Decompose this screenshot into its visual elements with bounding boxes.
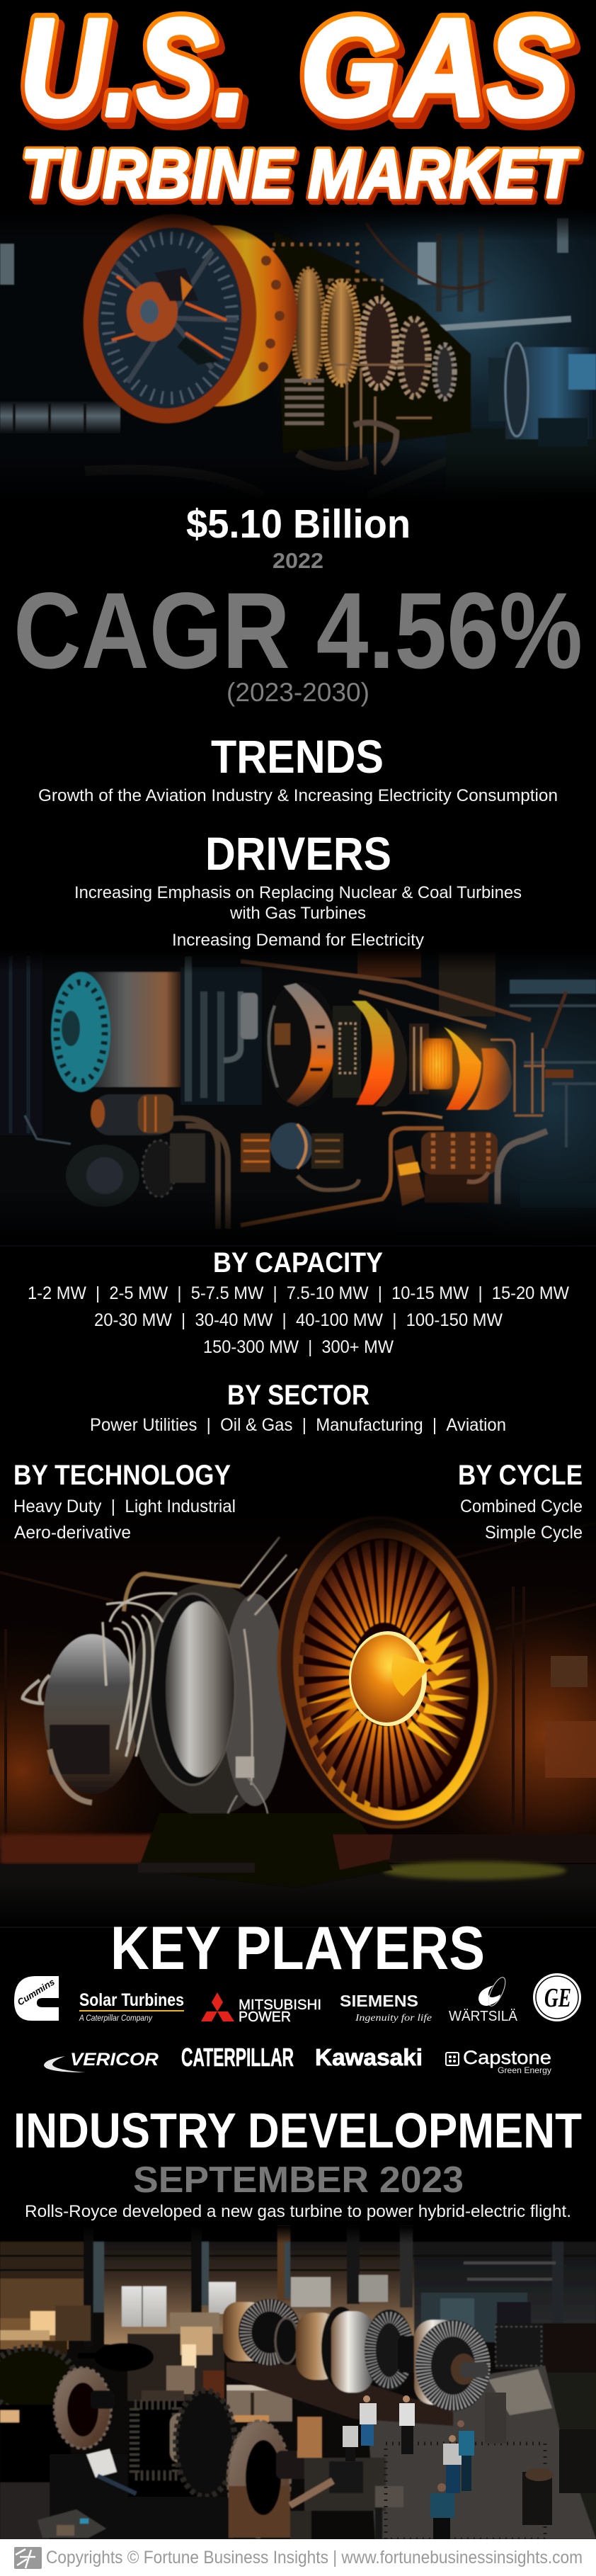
logo: Wartsila (449, 1975, 518, 2024)
cycle options: Combined Cycle (460, 1497, 583, 1516)
section: by capacity (28, 1247, 569, 1357)
logo: Mitsubishi Power: POWER (239, 2009, 291, 2025)
image: glowing jet turbine (0, 1507, 596, 1928)
title (20, 0, 582, 216)
image: gas turbine engine in dark hall (0, 205, 596, 503)
fan cone (349, 1631, 432, 1726)
capacity options (28, 1283, 569, 1357)
logo: Wartsila: WÄRTSILÄ (449, 2009, 518, 2024)
footer bar (0, 2539, 596, 2576)
development date: SEPTEMBER 2023 (133, 2160, 464, 2201)
capacity options: 150-300 MW | 300+ MW (203, 1337, 394, 1357)
logo: Mitsubishi Power: MITSUBISHI (239, 1997, 321, 2013)
title line: TURBINE MARKET: MARKET (308, 135, 579, 212)
logo: Cummins (14, 1976, 59, 2021)
drivers text: Increasing Demand for Electricity (172, 931, 424, 950)
logo: Mitsubishi Power (201, 1992, 321, 2025)
title line: TURBINE MARKET: MARKET (311, 139, 582, 216)
logo: GE: GE (544, 1983, 571, 2013)
logo: Cummins: Cummins (16, 1976, 57, 2008)
logo: Siemens: Ingenuity for life (355, 2013, 432, 2024)
logo: Vericor: VERICOR (70, 2050, 159, 2070)
title line: TURBINE MARKET: TURBINE (21, 135, 294, 212)
logo: Vericor (44, 2050, 159, 2072)
CAGR period: (2023-2030) (227, 678, 369, 707)
technology options: Aero-derivative (14, 1523, 131, 1543)
section: by sector (90, 1380, 506, 1435)
logo: Capstone Green Energy: Capstone (463, 2047, 551, 2068)
logo: Siemens (340, 1992, 432, 2024)
logo: Solar Turbines (79, 1990, 184, 2023)
workers (343, 2395, 474, 2539)
logo: GE (533, 1973, 581, 2021)
market size value: $5.10 Billion (186, 501, 411, 547)
heading: by sector: BY SECTOR (227, 1380, 369, 1411)
market size year: 2022 (273, 548, 323, 573)
trends text: Growth of the Aviation Industry & Increasing Electricity Consumption (38, 786, 558, 805)
development text: Rolls-Royce developed a new gas turbine to power hybrid-electric flight. (25, 2202, 571, 2221)
heading: by technology: BY TECHNOLOGY (13, 1460, 231, 1491)
logo: Capstone Green Energy (446, 2047, 551, 2075)
capacity options: 1-2 MW | 2-5 MW | 5-7.5 MW | 7.5-10 MW | 10-15 MW | 15-20 MW (28, 1283, 569, 1303)
heading: key players: KEY PLAYERS (110, 1914, 485, 1982)
title line: TURBINE MARKET (21, 135, 582, 216)
foreground machinery (0, 2347, 403, 2539)
logo: Caterpillar: CATERPILLAR (181, 2043, 294, 2072)
heading: by capacity: BY CAPACITY (213, 1247, 383, 1278)
section: by cycle (458, 1460, 583, 1543)
image: turbine machinery with glowing section (0, 949, 596, 1247)
fan wheel (264, 1507, 510, 1838)
title line: TURBINE MARKET: TURBINE (21, 135, 294, 212)
logo: Solar Turbines: Solar Turbines (79, 1990, 184, 2010)
title line: TURBINE MARKET: TURBINE (24, 139, 297, 216)
title line: TURBINE MARKET: MARKET (308, 135, 579, 212)
technology options (13, 1497, 236, 1543)
logo: Siemens: SIEMENS (340, 1992, 418, 2010)
rotor assembly (223, 2299, 491, 2426)
logo: Kawasaki: Kawasaki (315, 2044, 423, 2070)
sector options: Power Utilities | Oil & Gas | Manufacturing | Aviation (90, 1415, 506, 1435)
turbine front wheel (73, 205, 297, 432)
section: by technology (13, 1460, 236, 1543)
key player logos (14, 1973, 581, 2075)
technology options: Heavy Duty | Light Industrial (13, 1497, 236, 1516)
drivers text (74, 883, 522, 950)
image: turbine rotors in workshop with workers (0, 2226, 596, 2539)
logo: Capstone Green Energy: Green Energy (498, 2065, 551, 2075)
footer logo (14, 2547, 42, 2569)
cycle options (460, 1497, 583, 1543)
title line: U.S. GAS: U.S. (25, 0, 253, 152)
heading: drivers: DRIVERS (205, 827, 391, 880)
capacity options: 20-30 MW | 30-40 MW | 40-100 MW | 100-150 MW (94, 1310, 503, 1330)
cycle options: Simple Cycle (485, 1523, 583, 1543)
heading: trends: TRENDS (211, 730, 384, 783)
logo: Solar Turbines: A Caterpillar Company (79, 2013, 153, 2023)
title line: U.S. GAS (20, 0, 575, 152)
drivers text: with Gas Turbines (229, 904, 366, 923)
drivers text: Increasing Emphasis on Replacing Nuclear & Coal Turbines (74, 883, 522, 902)
